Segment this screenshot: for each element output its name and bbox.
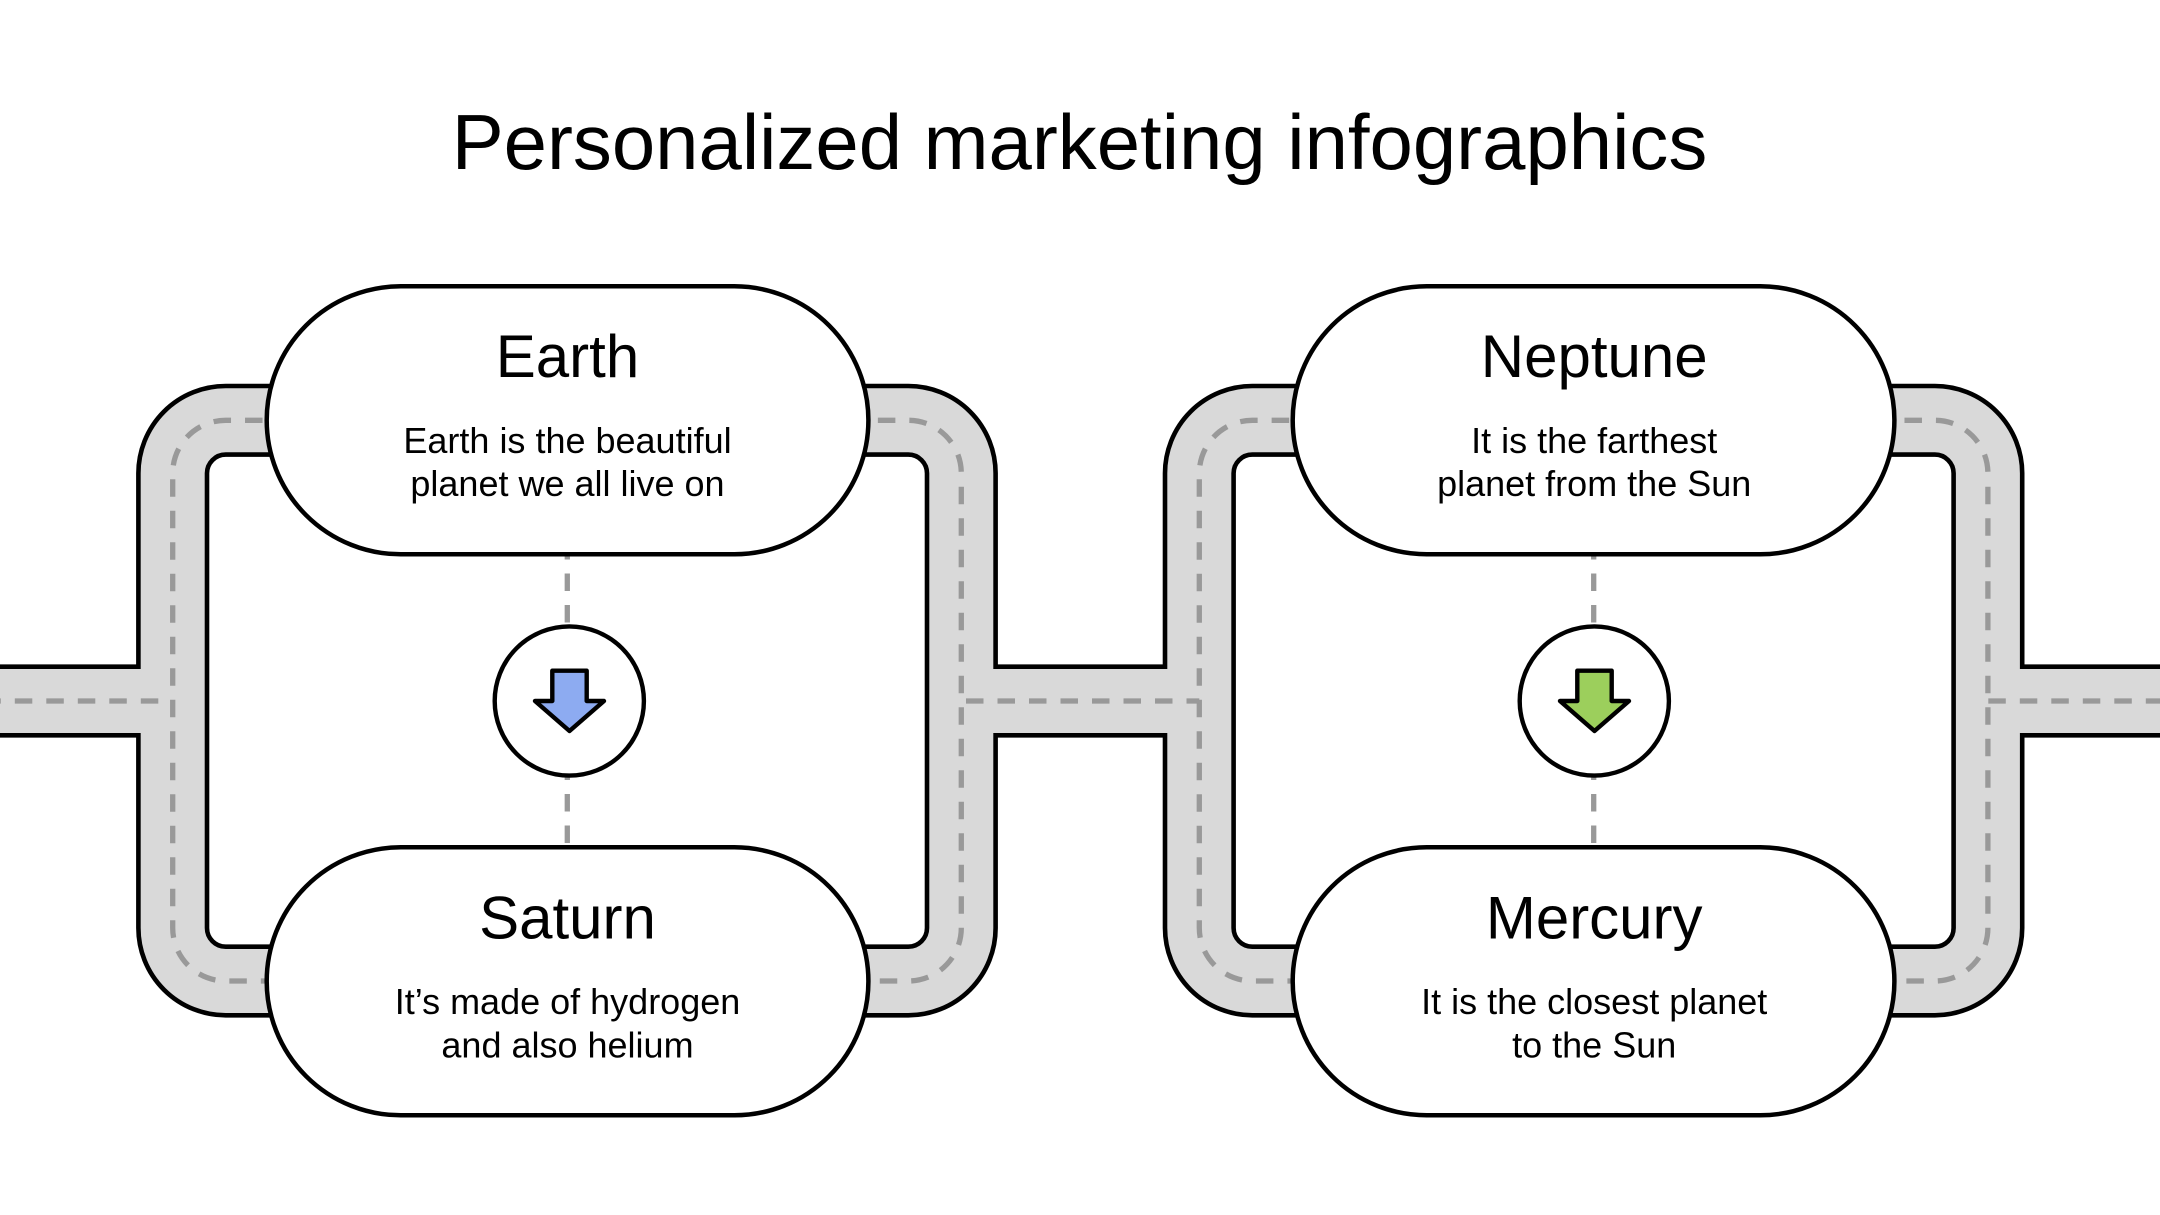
text: Saturn description: and also helium xyxy=(441,1024,694,1065)
center connector: green arrow xyxy=(1520,626,1669,776)
circle xyxy=(495,626,644,776)
text: Earth description: planet we all live on xyxy=(410,463,725,504)
heading: Earth: Earth xyxy=(496,323,639,390)
road centre dashes xyxy=(0,420,2160,981)
text: Saturn description: It’s made of hydrogen xyxy=(395,981,740,1022)
text: Neptune description: It is the farthest xyxy=(1471,420,1717,461)
icon: blue down arrow xyxy=(535,671,604,731)
panel: Saturn xyxy=(267,847,868,1115)
center connector: blue arrow xyxy=(495,626,644,776)
circle xyxy=(1520,626,1669,776)
panel: Mercury xyxy=(1293,847,1894,1115)
icon: green down arrow xyxy=(1560,671,1629,731)
road network xyxy=(0,420,2160,981)
panel: Neptune xyxy=(1293,286,1894,554)
text: Mercury description: It is the closest planet xyxy=(1421,981,1767,1022)
text: Neptune description: planet from the Sun xyxy=(1437,463,1751,504)
title: Personalized marketing infographics xyxy=(452,98,1707,186)
heading: Neptune: Neptune xyxy=(1481,323,1708,390)
panel: Earth xyxy=(267,286,868,554)
heading: Mercury: Mercury xyxy=(1486,884,1703,952)
text: Mercury description: to the Sun xyxy=(1512,1024,1676,1065)
heading: Saturn: Saturn xyxy=(479,884,656,952)
text: Earth description: Earth is the beautiful xyxy=(403,420,732,461)
